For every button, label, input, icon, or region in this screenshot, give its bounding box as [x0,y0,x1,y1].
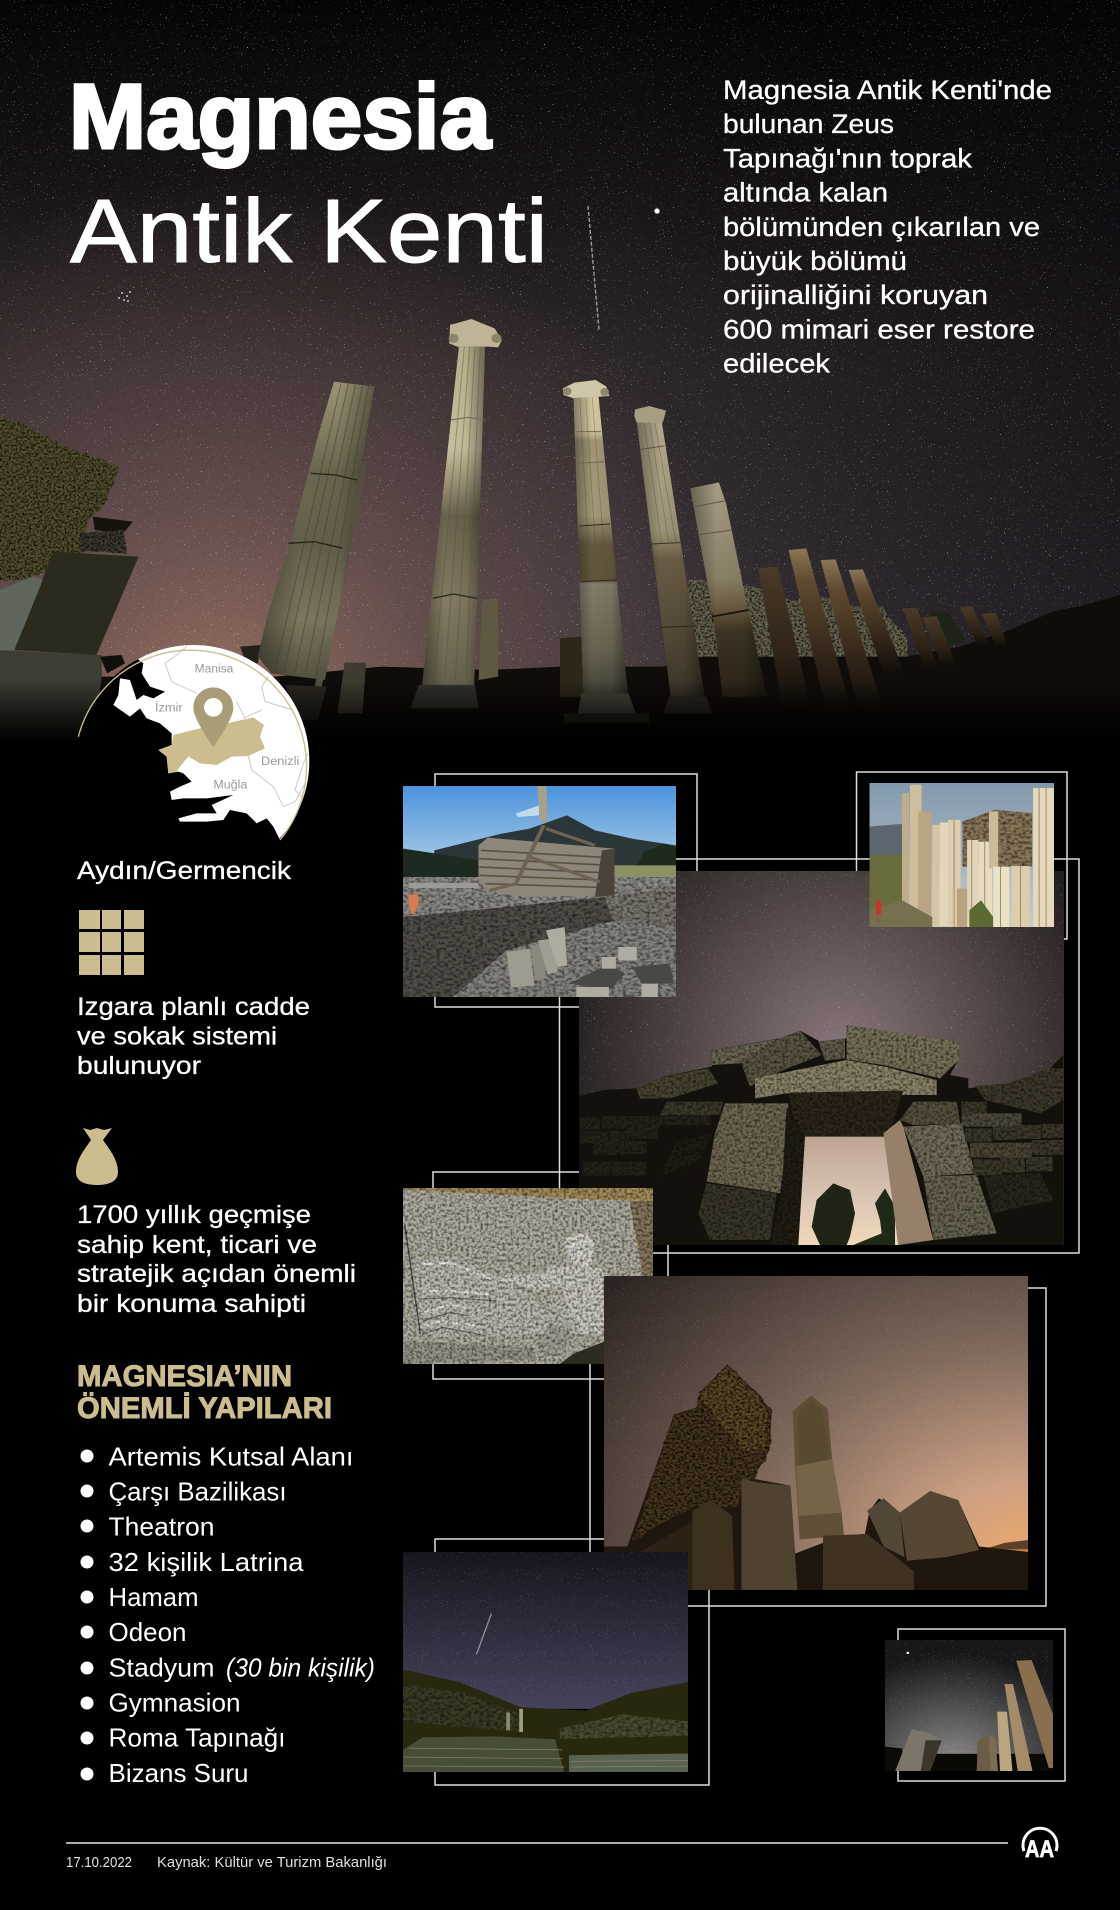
list of structures: Bizans Suru [108,1758,248,1788]
list of structures: Odeon [108,1617,186,1647]
list of structures: Hamam [108,1582,198,1612]
intro paragraph: 600 mimari eser restore [723,314,1035,344]
hero photo: night sky with ancient columns [0,0,1120,781]
location pin [193,687,233,747]
ground silhouette [0,595,1120,750]
photo: theatre under stars [403,1552,688,1772]
stone blocks [506,949,534,988]
list of structures: (30 bin kişilik) [226,1652,375,1682]
column B: tall Ionic column [411,319,502,708]
text: street grid: ve sokak sistemi [77,1022,277,1050]
bright star [654,208,660,214]
province labels: İzmir [155,701,183,715]
column A: fluted drum column [258,382,374,720]
hanging drum [478,838,615,897]
column E: square pier [690,482,767,697]
list of structures: Çarşı Bazilikası [108,1476,286,1506]
photo: columns at dusk [885,1640,1053,1771]
text: street grid: bulunuyor [77,1052,201,1080]
text: street grid: Izgara planlı cadde [77,993,310,1021]
heading: important structures [77,1360,332,1425]
province labels: Denizli [261,754,299,768]
icon: agency logo: AA [1025,1836,1054,1863]
photo: gate ruin at night [579,871,1064,1245]
standing column [793,1396,844,1539]
list of structures: 32 kişilik Latrina [108,1547,304,1577]
intro paragraph: orijinalliğini koruyan [723,280,988,310]
left ruin [0,413,139,750]
land [81,645,310,839]
pleiades cluster [118,291,131,302]
text: history [77,1201,356,1318]
icon: street grid [79,910,144,975]
intro paragraph: Tapınağı'nın toprak [723,144,973,174]
clay vase [409,894,419,914]
left half of the colonnade [0,319,502,750]
heading: important structures: ÖNEMLİ YAPILARI [77,1392,332,1425]
text: history: 1700 yıllık geçmişe [77,1201,311,1229]
text: history: stratejik açıdan önemli [77,1260,356,1288]
footer rule [66,1842,1008,1844]
province labels: Manisa [195,662,234,676]
intro paragraph: bulunan Zeus [723,109,894,139]
photo: rock and column against glowing sky [604,1276,1028,1590]
icon: money bag [76,1128,118,1185]
meteor trail [588,206,599,330]
list of structures: Roma Tapınağı [108,1722,286,1752]
intro paragraph: altında kalan [723,178,888,208]
list of structures: Stadyum [108,1652,214,1682]
intro paragraph: Magnesia Antik Kenti'nde [723,75,1052,105]
locator map [78,645,310,840]
far columns [758,548,1008,712]
right half of the colonnade [0,380,1120,750]
title [69,66,548,282]
stub columns [479,598,498,680]
capital of column B [449,319,502,347]
photo: crane lifting column drum [403,786,676,997]
stone slabs [741,1479,797,1590]
title: Magnesia [69,66,492,168]
intro paragraph [723,75,1052,378]
list of structures: Artemis Kutsal Alanı [108,1442,354,1472]
photo: marble colonnade [870,783,1054,927]
province labels: Muğla [213,777,248,791]
text: history: sahip kent, ticari ve [77,1231,317,1259]
icon: agency logo [1023,1828,1057,1863]
province labels [155,662,299,791]
person [876,901,881,914]
column D: Corinthian column [634,406,712,713]
horses [413,1256,550,1337]
intro paragraph: büyük bölümü [723,246,907,276]
column C: Ionic column [563,380,649,723]
intro paragraph: bölümünden çıkarılan ve [723,212,1040,242]
title: Antik Kenti [70,182,548,282]
list of structures [80,1442,375,1788]
photo outline frames [433,772,1079,1785]
location label: Aydın/Germencik [77,857,292,885]
footer source: Kaynak: Kültür ve Turizm Bakanlığı [157,1854,387,1871]
heading: important structures: MAGNESIA’NIN [77,1360,292,1393]
text: history: bir konuma sahipti [77,1290,306,1318]
photo: relief of horses and figure [403,1188,653,1364]
intro paragraph: edilecek [723,348,831,378]
text: street grid [77,993,310,1080]
map arc [78,650,307,840]
list of structures: Gymnasion [108,1688,240,1718]
list of structures: Theatron [108,1512,214,1542]
distant rock wall [689,580,908,660]
figure [565,1233,594,1269]
trees in doorway [812,1183,855,1245]
footer date: 17.10.2022 [66,1854,132,1871]
Aydın province [158,717,265,773]
